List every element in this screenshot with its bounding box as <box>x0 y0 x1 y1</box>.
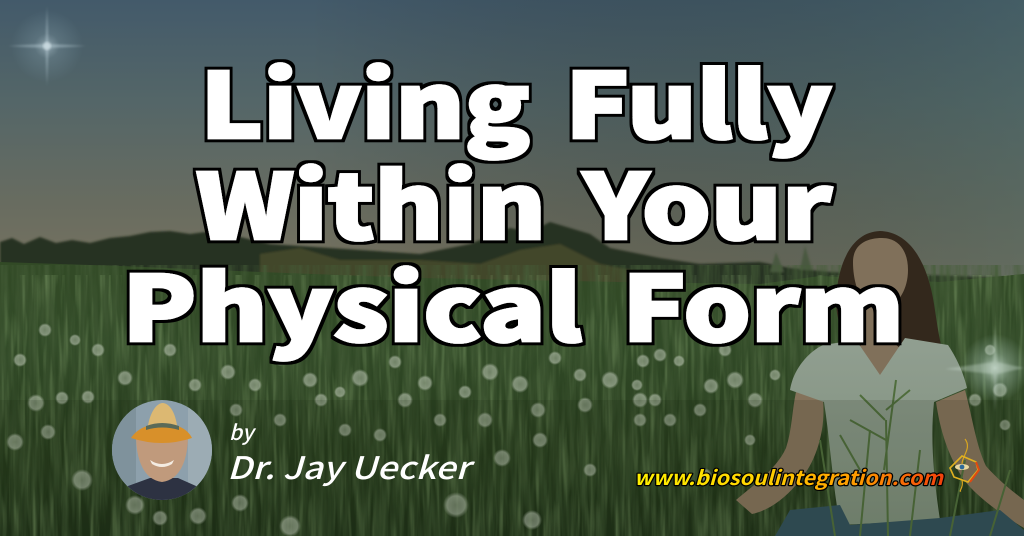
figure: woman meditating <box>736 231 1024 536</box>
background: tree line <box>0 222 1024 300</box>
icon: eye logo <box>950 439 979 491</box>
jeans <box>775 505 1024 536</box>
title: Form <box>622 237 904 367</box>
icon: star flare top left <box>8 6 86 86</box>
dark overlay fade at bottom <box>0 400 1024 536</box>
byline: Dr. Jay Uecker <box>227 443 476 488</box>
hat <box>148 403 177 426</box>
website url: www.biosoulintegration.com <box>634 462 945 491</box>
byline: by <box>229 417 257 447</box>
shirt <box>790 338 967 525</box>
title: Within <box>196 135 546 265</box>
background: meadow grass <box>0 262 1024 536</box>
title: Fully <box>565 34 832 164</box>
title: Physical <box>122 237 582 367</box>
face <box>136 435 188 482</box>
shoulders <box>128 478 196 500</box>
foreground grass blades <box>820 380 1010 536</box>
hair <box>836 231 946 362</box>
icon: sparkle on right <box>945 325 1024 412</box>
title: Your <box>582 135 832 265</box>
title <box>122 34 904 367</box>
arms <box>736 390 1024 528</box>
face and neck <box>853 238 908 380</box>
author avatar <box>110 398 214 502</box>
title: Living <box>200 34 530 164</box>
background: sky <box>0 0 1024 290</box>
byline <box>227 417 476 488</box>
background: dandelions <box>6 323 1011 536</box>
